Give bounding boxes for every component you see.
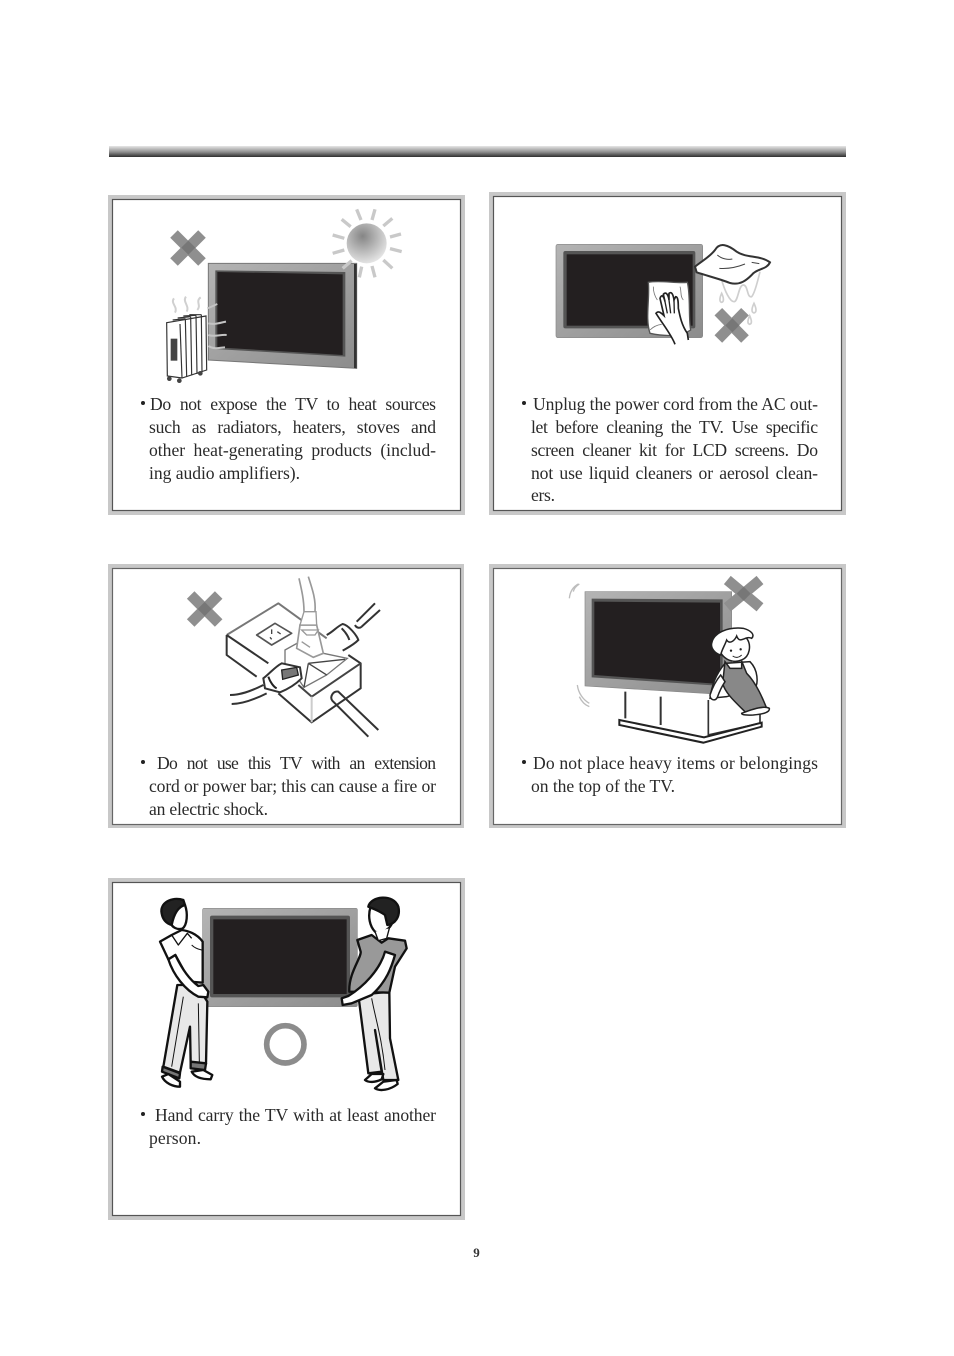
icon: power strip: [227, 603, 361, 722]
icon: wobble marks: [569, 584, 589, 707]
illustration: TV being wiped: [556, 244, 770, 344]
text: heat sources: ing audio amplifiers).: [149, 463, 300, 483]
icon: prohibited cross: [727, 580, 760, 607]
page number: 9: [473, 1245, 480, 1260]
icon: sun: [333, 209, 402, 277]
icon: TV: [556, 244, 703, 338]
text: extension cord: [141, 753, 436, 819]
icon: prohibited cross: [718, 312, 745, 339]
text: carrying: [141, 1105, 436, 1148]
icon: drips: [720, 272, 760, 324]
icon: radiator: [167, 315, 207, 383]
icon: right plug: [327, 603, 380, 651]
text: carrying: Hand carry the TV with at least another: [155, 1105, 436, 1125]
text: extension cord: Do not use this TV with an extension: [157, 753, 436, 773]
icon: TV: [203, 908, 357, 1007]
panel: heavy items: [491, 566, 844, 826]
icon: wet cloth: [695, 245, 770, 284]
text: cleaning: ers.: [531, 485, 555, 505]
illustration: child on TV stand: [569, 580, 769, 743]
text: heat sources: such as radiators, heaters, stoves and: [149, 417, 436, 437]
panel: cleaning: [491, 194, 844, 513]
icon: TV: [585, 592, 732, 695]
text: cleaning: Unplug the power cord from the AC out-: [533, 394, 818, 414]
icon: strip cable: [331, 692, 378, 737]
panel: carrying: [110, 880, 463, 1218]
panel: extension cord: [110, 566, 462, 826]
text: extension cord: cord or power bar; this can cause a fire or: [149, 776, 436, 796]
text: cleaning: let before cleaning the TV. Use specific: [531, 417, 818, 437]
text: heavy items: [522, 753, 818, 796]
text: heat sources: Do not expose the TV to heat sources: [150, 394, 436, 414]
icon: left person: [160, 899, 212, 1087]
icon: TV stand: [619, 692, 762, 743]
text: cleaning: not use liquid cleaners or aerosol clean-: [531, 463, 818, 483]
icon: prohibited cross: [191, 595, 219, 623]
icon: heat waves: [173, 297, 227, 348]
illustration: two people carrying TV: [160, 898, 407, 1090]
text: extension cord: an electric shock.: [149, 799, 268, 819]
icon: left plug: [230, 663, 302, 704]
text: cleaning: [522, 394, 818, 505]
text: heat sources: [141, 394, 436, 483]
icon: cloth and hand: [648, 282, 691, 344]
text: heavy items: on the top of the TV.: [531, 776, 675, 796]
text: heat sources: other heat-generating products (includ-: [149, 440, 436, 460]
text: heavy items: Do not place heavy items or belongings: [533, 753, 818, 773]
header bar: [109, 146, 846, 157]
text: carrying: person.: [149, 1128, 201, 1148]
icon: right person: [342, 898, 407, 1090]
illustration: TV, radiator and sun: [167, 209, 402, 383]
icon: prohibited cross: [174, 234, 202, 262]
icon: approved circle: [267, 1026, 304, 1063]
icon: child: [710, 628, 769, 715]
icon: TV: [208, 263, 357, 368]
illustration: overloaded power strip: [191, 577, 380, 737]
panel: heat sources: [110, 197, 463, 513]
icon: central plug: [285, 577, 347, 687]
text: cleaning: screen cleaner kit for LCD screens. Do: [531, 440, 818, 460]
